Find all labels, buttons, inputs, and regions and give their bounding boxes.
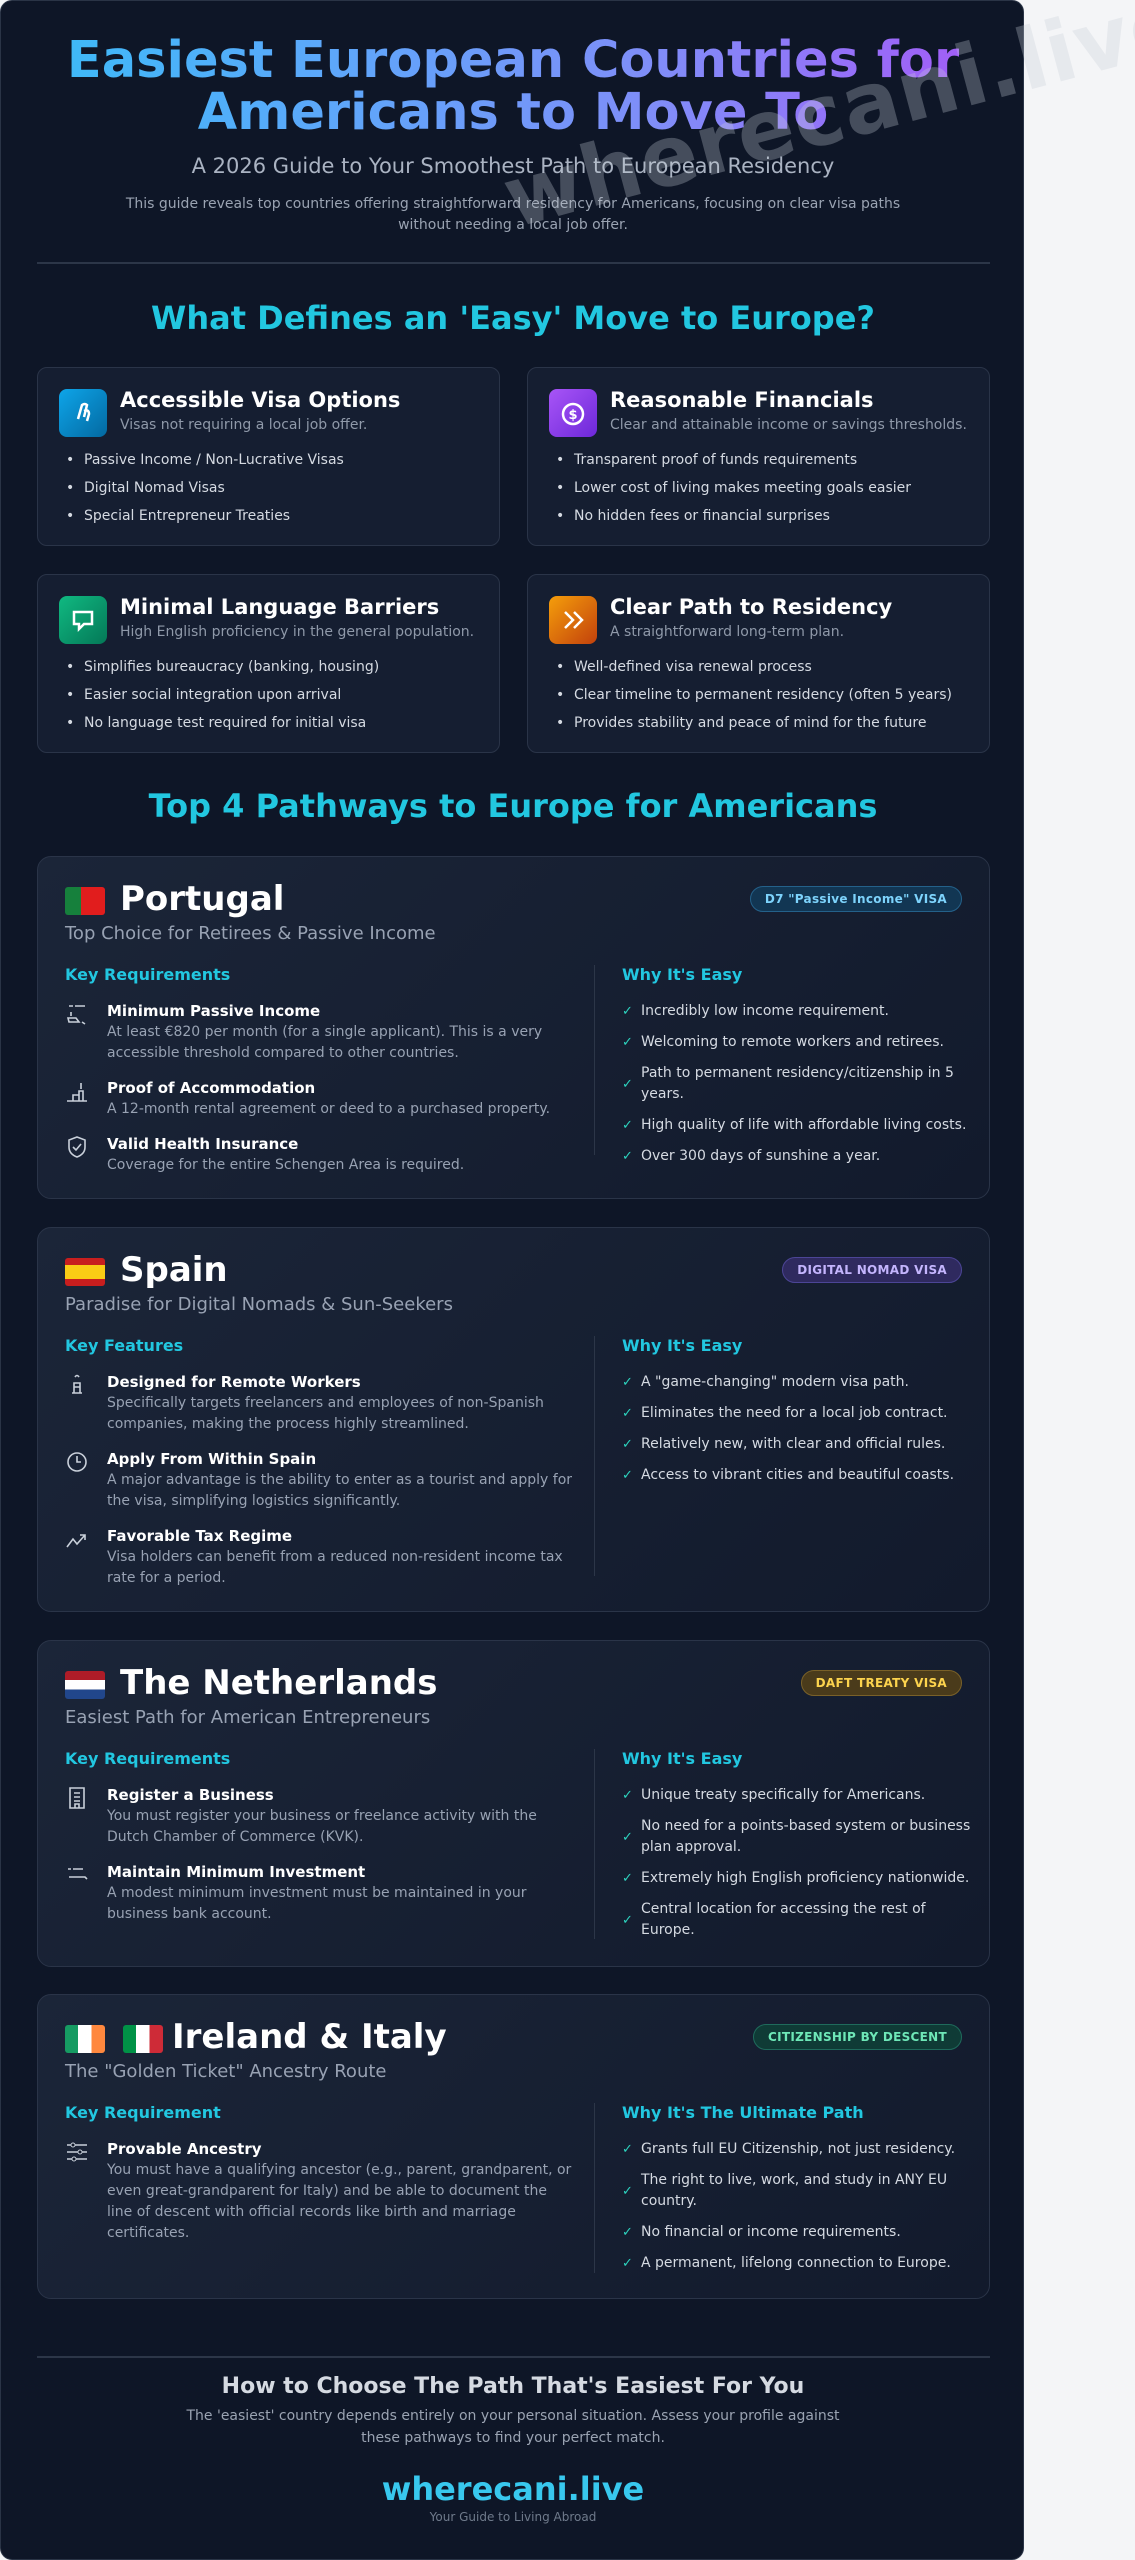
panel: portugal (37, 856, 990, 1199)
requirements list: A 12-month rental agreement or deed to a purchased property. (107, 1101, 550, 1117)
icon: money: $ (568, 408, 578, 423)
features list: Apply From Within Spain (107, 1450, 316, 1468)
panel: accessible visa options: Visas not requiring a local job offer. (120, 417, 367, 433)
why easy list: Unique treaty specifically for Americans. (641, 1787, 925, 1803)
badge: DIGITAL NOMAD VISA (797, 1263, 947, 1277)
panel: accessible visa options: Special Entrepreneur Treaties (84, 508, 290, 524)
title (1, 35, 1025, 139)
features list: the visa, simplifying logistics significantly. (107, 1493, 400, 1509)
requirement (67, 2140, 572, 2241)
features list: A major advantage is the ability to enter as a tourist and apply for (107, 1472, 572, 1488)
why easy list: Eliminates the need for a local job contract. (641, 1405, 948, 1421)
why list: No financial or income requirements. (641, 2224, 901, 2240)
panel: minimal language barriers: Minimal Language Barriers (120, 595, 439, 619)
panel: netherlands: Easiest Path for American Entrepreneurs (65, 1707, 430, 1728)
why easy list: years. (641, 1086, 684, 1102)
panel: accessible visa options: Digital Nomad Visas (84, 480, 225, 496)
panel: netherlands (37, 1640, 990, 1967)
footer heading: How to Choose The Path That's Easiest For You (222, 2374, 804, 2399)
why easy list (624, 1374, 954, 1483)
panel: minimal language barriers: No language test required for initial visa (84, 715, 366, 731)
flag: spain (65, 1258, 105, 1286)
panel: reasonable financials: Lower cost of living makes meeting goals easier (574, 480, 911, 496)
requirements list: Coverage for the entire Schengen Area is required. (107, 1157, 464, 1173)
why list (624, 2141, 955, 2271)
panel: ireland & italy: The "Golden Ticket" Ancestry Route (65, 2061, 386, 2082)
why easy list: Extremely high English proficiency nationwide. (641, 1870, 969, 1886)
why easy list: Europe. (641, 1922, 695, 1938)
why easy list (624, 1003, 966, 1164)
panel: clear path to residency: Well-defined visa renewal process (574, 659, 812, 675)
features list: rate for a period. (107, 1570, 226, 1586)
features list (66, 1373, 572, 1586)
panel: ireland & italy: Ireland & Italy (172, 2017, 447, 2057)
badge: DAFT TREATY VISA (816, 1676, 947, 1690)
requirements list: At least €820 per month (for a single applicant). This is a very (107, 1024, 542, 1040)
why list: The right to live, work, and study in ANY EU (641, 2172, 947, 2188)
features list: Favorable Tax Regime (107, 1527, 292, 1545)
footer text: these pathways to find your perfect match. (361, 2430, 665, 2446)
requirements list: A modest minimum investment must be maintained in your (107, 1885, 527, 1901)
heading: top 4 pathways: Top 4 Pathways to Europe for Americans (149, 787, 877, 825)
requirements list: Minimum Passive Income (107, 1002, 320, 1020)
why easy list: Incredibly low income requirement. (641, 1003, 889, 1019)
why easy list: No need for a points-based system or business (641, 1818, 970, 1834)
badge (782, 1257, 962, 1283)
requirement: line of descent with official records like birth and marriage (107, 2204, 516, 2220)
panel: ireland & italy (37, 1994, 990, 2299)
features list: Visa holders can benefit from a reduced non-resident income tax (107, 1549, 563, 1565)
icon: money (549, 389, 597, 437)
panel: accessible visa options (37, 367, 500, 546)
panel: ireland & italy: Key Requirement (65, 2103, 221, 2122)
heading: what defines easy: What Defines an 'Easy' Move to Europe? (151, 299, 875, 337)
panel: clear path to residency: A straightforward long-term plan. (610, 624, 844, 640)
features list: companies, making the process highly streamlined. (107, 1416, 469, 1432)
panel: portugal: Why It's Easy (622, 965, 742, 984)
icon: visa (59, 389, 107, 437)
flag: portugal (65, 887, 105, 915)
requirements list: You must register your business or freelance activity with the (107, 1808, 537, 1824)
why easy list: High quality of life with affordable living costs. (641, 1117, 966, 1133)
badge (753, 2024, 962, 2050)
intro text (126, 196, 900, 233)
panel: clear path to residency: Clear Path to Residency (610, 595, 892, 619)
badge (750, 886, 962, 912)
requirements list: Proof of Accommodation (107, 1079, 315, 1097)
panel: netherlands: Key Requirements (65, 1749, 230, 1768)
panel: spain (37, 1227, 990, 1612)
requirements list: accessible threshold compared to other countries. (107, 1045, 459, 1061)
why easy list: Central location for accessing the rest of (641, 1901, 926, 1917)
panel: reasonable financials: Transparent proof of funds requirements (574, 452, 857, 468)
requirements list (68, 1786, 537, 1922)
panel: reasonable financials (527, 367, 990, 546)
panel: minimal language barriers (37, 574, 500, 753)
footer text (186, 2408, 840, 2446)
panel: reasonable financials: Clear and attainable income or savings thresholds. (610, 417, 967, 433)
why easy list: Access to vibrant cities and beautiful coasts. (641, 1467, 954, 1483)
panel: clear path to residency: Provides stability and peace of mind for the future (574, 715, 926, 731)
panel: spain: Key Features (65, 1336, 183, 1355)
why easy list: Path to permanent residency/citizenship in 5 (641, 1065, 954, 1081)
panel: spain: Why It's Easy (622, 1336, 742, 1355)
badge: D7 "Passive Income" VISA (765, 892, 947, 906)
panel: minimal language barriers: Easier social integration upon arrival (84, 687, 341, 703)
badge (801, 1670, 962, 1696)
why easy list: A "game-changing" modern visa path. (641, 1374, 909, 1390)
panel: ireland & italy: Why It's The Ultimate Path (622, 2103, 864, 2122)
flag: netherlands (65, 1671, 105, 1699)
why list: A permanent, lifelong connection to Europe. (641, 2255, 951, 2271)
flags: ireland and italy (65, 2025, 163, 2053)
intro text: This guide reveals top countries offering straightforward residency for Americans, focusing on clear visa paths (126, 196, 900, 212)
panel: spain: Paradise for Digital Nomads & Sun-Seekers (65, 1294, 453, 1315)
why easy list: Welcoming to remote workers and retirees. (641, 1034, 944, 1050)
why easy list: Over 300 days of sunshine a year. (641, 1148, 880, 1164)
badge: CITIZENSHIP BY DESCENT (768, 2030, 947, 2044)
panel: portugal: Portugal (120, 879, 284, 919)
features list: Specifically targets freelancers and employees of non-Spanish (107, 1395, 544, 1411)
panel: reasonable financials: No hidden fees or financial surprises (574, 508, 830, 524)
features list: Designed for Remote Workers (107, 1373, 361, 1391)
requirement: certificates. (107, 2225, 189, 2241)
why list: country. (641, 2193, 697, 2209)
title: Americans to Move To (198, 83, 828, 142)
subtitle: A 2026 Guide to Your Smoothest Path to European Residency (192, 154, 834, 178)
panel: accessible visa options: Accessible Visa Options (120, 388, 400, 412)
panel: spain: Spain (120, 1250, 228, 1290)
panel: reasonable financials: Reasonable Financials (610, 388, 874, 412)
panel: portugal: Top Choice for Retirees & Passive Income (65, 923, 436, 944)
panel: clear path to residency: Clear timeline to permanent residency (often 5 years) (574, 687, 952, 703)
requirement: You must have a qualifying ancestor (e.g., parent, grandparent, or (107, 2162, 571, 2178)
requirements list: business bank account. (107, 1906, 272, 1922)
requirements list: Maintain Minimum Investment (107, 1863, 365, 1881)
requirement: even great-grandparent for Italy) and be able to document the (107, 2183, 547, 2199)
icon: speech (59, 596, 107, 644)
tagline: Your Guide to Living Abroad (430, 2510, 596, 2524)
requirements list: Dutch Chamber of Commerce (KVK). (107, 1829, 363, 1845)
panel: netherlands: The Netherlands (120, 1663, 437, 1703)
why easy list (624, 1787, 970, 1938)
icon: arrows (549, 596, 597, 644)
requirements list: Register a Business (107, 1786, 274, 1804)
panel: netherlands: Why It's Easy (622, 1749, 742, 1768)
logo: wherecani.live (382, 2470, 644, 2508)
why easy list: plan approval. (641, 1839, 741, 1855)
intro text: without needing a local job offer. (398, 217, 628, 233)
why easy list: Relatively new, with clear and official rules. (641, 1436, 945, 1452)
panel: minimal language barriers: Simplifies bureaucracy (banking, housing) (84, 659, 379, 675)
panel: clear path to residency (527, 574, 990, 753)
requirements list (67, 1002, 550, 1173)
requirements list: Valid Health Insurance (107, 1135, 298, 1153)
requirement: Provable Ancestry (107, 2140, 262, 2158)
panel: portugal: Key Requirements (65, 965, 230, 984)
why list: Grants full EU Citizenship, not just residency. (641, 2141, 955, 2157)
title: Easiest European Countries for (67, 31, 959, 90)
panel: accessible visa options: Passive Income / Non-Lucrative Visas (84, 452, 344, 468)
panel: minimal language barriers: High English proficiency in the general population. (120, 624, 474, 640)
footer text: The 'easiest' country depends entirely on your personal situation. Assess your profile against (186, 2408, 840, 2424)
